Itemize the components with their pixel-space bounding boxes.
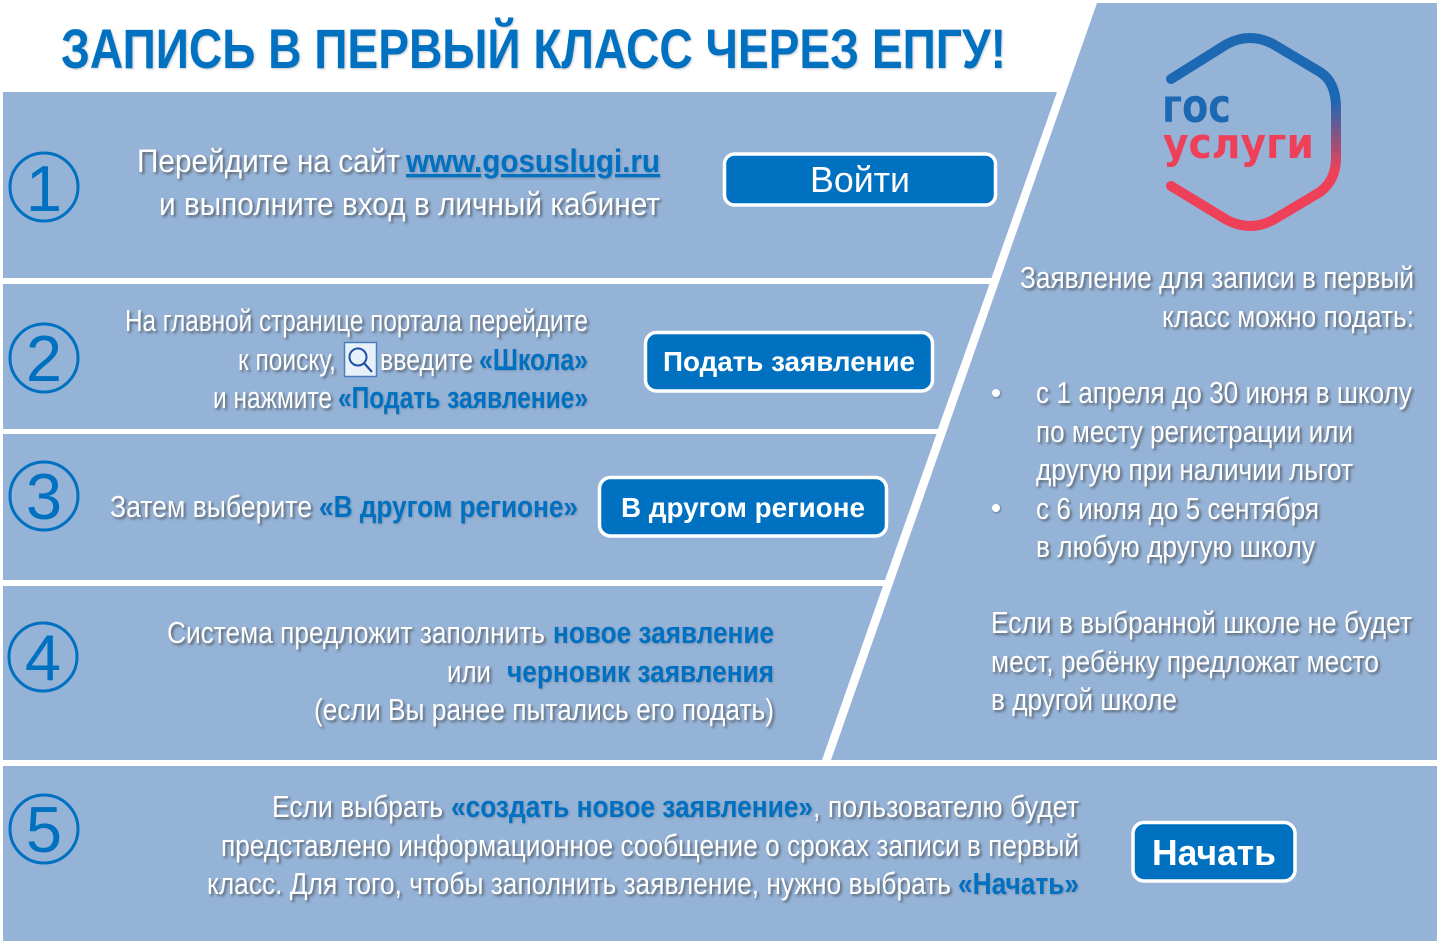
step 2 text: «Школа»	[479, 342, 588, 377]
button: Подать заявление: Подать заявление	[663, 346, 915, 377]
button: Начать: Начать	[1152, 832, 1276, 873]
step 5 text	[207, 789, 1079, 901]
icon: search	[344, 342, 376, 376]
step 2 text	[125, 303, 588, 415]
button: Подать заявление	[646, 332, 932, 391]
step 4 text: черновик заявления	[507, 654, 774, 689]
step 4 number: 4	[25, 621, 61, 694]
button: Войти	[724, 154, 996, 205]
step 5 text: класс. Для того, чтобы заполнить заявление, нужно выбрать	[207, 866, 951, 901]
step 5 text: , пользователю будет	[813, 789, 1079, 824]
step 4 text	[167, 615, 774, 727]
step 5 text: Если выбрать	[272, 789, 443, 824]
step 2 text: введите	[380, 342, 473, 377]
step 3 text: Затем выберите	[110, 489, 312, 524]
button: В другом регионе: В другом регионе	[621, 492, 865, 523]
step 1 number	[10, 152, 78, 225]
title: ЗАПИСЬ В ПЕРВЫЙ КЛАСС ЧЕРЕЗ ЕПГУ!	[61, 17, 1006, 80]
step 1 text	[137, 143, 660, 222]
step 3 text	[110, 489, 578, 524]
step 1 text: и выполните вход в личный кабинет	[159, 186, 660, 222]
panel: info sidebar	[831, 3, 1437, 760]
step 5 number	[10, 793, 78, 866]
panel: step 5	[3, 766, 1437, 941]
panel: step 1	[3, 92, 1057, 278]
button: В другом регионе	[600, 478, 886, 536]
step 5 text: представлено информационное сообщение о сроках записи в первый	[221, 828, 1079, 863]
step 1 text: Перейдите на сайт	[137, 143, 400, 179]
logo: Госуслуги: гос	[1162, 79, 1231, 133]
step 2 number	[10, 322, 78, 395]
step 2 text: к поиску,	[238, 342, 336, 377]
step 3 number	[10, 460, 78, 533]
step 5 text: «создать новое заявление»	[451, 789, 813, 824]
sidebar bullet list	[992, 375, 1412, 564]
sidebar bullet list: другую при наличии льгот	[1036, 452, 1353, 487]
step 2 text: «Подать заявление»	[338, 380, 588, 415]
sidebar closing note: мест, ребёнку предложат место	[991, 644, 1379, 679]
panel: step 4	[3, 586, 883, 760]
step 3 number: 3	[26, 460, 62, 533]
button: Начать	[1133, 822, 1295, 881]
step 5 number: 5	[26, 793, 62, 866]
step 2 number: 2	[26, 322, 62, 395]
step 4 text: Система предложит заполнить	[167, 615, 545, 650]
panel: step 2	[3, 284, 990, 429]
step 4 text: (если Вы ранее пытались его подать)	[314, 692, 774, 727]
sidebar bullet list: по месту регистрации или	[1036, 414, 1353, 449]
sidebar bullet list: с 6 июля до 5 сентября	[1036, 491, 1319, 526]
step 1 text: www.gosuslugi.ru	[405, 143, 660, 179]
button: Войти: Войти	[810, 159, 910, 200]
panel: step 3	[3, 434, 936, 580]
step 4 text: или	[447, 654, 491, 689]
logo: Госуслуги: услуги	[1163, 119, 1314, 168]
logo: Госуслуги	[1162, 38, 1336, 226]
sidebar bullet list: в любую другую школу	[1036, 529, 1315, 564]
sidebar intro text	[1020, 260, 1414, 334]
step 1 number: 1	[26, 152, 62, 225]
step 4 number	[9, 621, 77, 694]
sidebar closing note	[991, 605, 1412, 717]
step 3 text: «В другом регионе»	[319, 489, 578, 524]
step 4 text: новое заявление	[553, 615, 774, 650]
step 5 text: «Начать»	[958, 866, 1079, 901]
step 2 text: На главной странице портала перейдите	[125, 303, 588, 338]
sidebar closing note: в другой школе	[991, 682, 1177, 717]
step 2 text: и нажмите	[213, 380, 332, 415]
